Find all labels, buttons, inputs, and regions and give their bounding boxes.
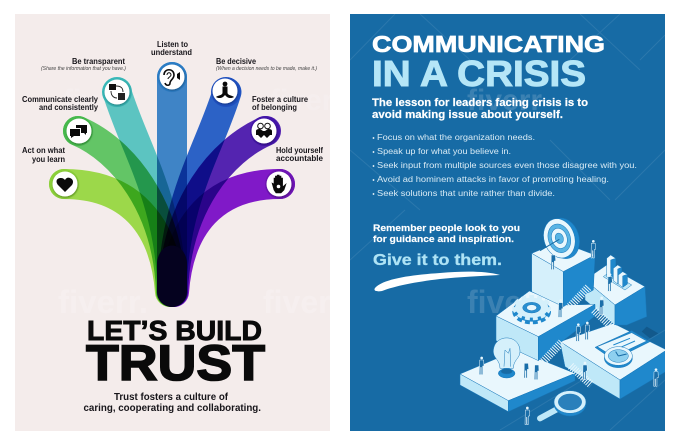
label: be decisive [216, 58, 317, 71]
panel: let's build trust [15, 14, 345, 431]
band: be transparent [117, 92, 172, 292]
brush stroke [374, 272, 500, 291]
title: let's build trust [86, 320, 266, 382]
title: let's build trust: LET’S BUILD [87, 315, 262, 346]
block: lower right [560, 323, 668, 399]
subtitle [84, 392, 261, 414]
panel: communicating in a crisis: fiverr [467, 284, 547, 320]
call to action: Give it to them. [373, 252, 502, 269]
bullet list: Focus on what the organization needs. [377, 133, 535, 142]
label: be decisive: Be decisive [216, 57, 256, 66]
icon: magnifying glass [540, 391, 586, 418]
icon: bar columns [603, 255, 632, 290]
stem [157, 246, 187, 307]
fan chart of seven behaviours [64, 77, 280, 292]
lesson statement: avoid making issue about yourself. [372, 109, 563, 121]
title: communicating in a crisis: IN A CRISIS [372, 53, 586, 94]
label: act on what you learn: you learn [32, 155, 65, 164]
band: communicate clearly [78, 131, 171, 292]
icon: clipboard and stopwatch [595, 331, 650, 368]
icon: target [539, 214, 585, 263]
panel: communicating in a crisis [350, 14, 668, 431]
title: let's build trust: TRUST [86, 335, 265, 391]
label: foster a culture: Foster a culture [252, 95, 309, 104]
lesson statement [372, 97, 588, 121]
block: middle gear platform [496, 291, 595, 361]
label: communicate clearly [22, 95, 99, 112]
label: be transparent [41, 58, 126, 71]
subtitle: Trust fosters a culture of [114, 392, 229, 403]
subtitle: caring, cooperating and collaborating. [84, 403, 261, 414]
label: foster a culture [252, 95, 309, 112]
label: communicate clearly: Communicate clearly [22, 95, 99, 104]
label: hold yourself accountable [276, 147, 323, 161]
isometric illustration [460, 214, 668, 425]
title: communicating in a crisis: COMMUNICATING [372, 31, 605, 57]
panel: let's build trust: fiverr [63, 84, 138, 117]
band: be decisive [172, 92, 227, 292]
panel: let's build trust: fiverr [263, 284, 343, 320]
icon: two people with hearts [250, 116, 280, 146]
label: listen to understand [151, 41, 192, 55]
label: act on what you learn: Act on what [22, 146, 65, 155]
label: act on what you learn [22, 146, 65, 164]
label: listen to understand: Listen to [157, 40, 188, 49]
people [479, 240, 658, 425]
label: be transparent: (Share the information that you have.) [41, 66, 126, 72]
label: listen to understand: understand [151, 48, 192, 57]
label: be transparent: Be transparent [72, 57, 125, 66]
band: act on what you learn [64, 184, 170, 292]
panel: communicating in a crisis: fiverr [467, 84, 542, 117]
icon: ear [157, 62, 187, 92]
bullet list: Seek input from multiple sources even those disagree with you. [377, 161, 637, 170]
block: right chart platform [585, 265, 647, 325]
label: be decisive: (When a decision needs to be made, make it.) [216, 66, 317, 72]
icon: light bulb [493, 338, 520, 378]
bullet list [373, 133, 637, 198]
label: hold yourself accountable: accountable [276, 154, 324, 163]
icon: raised hand [265, 169, 295, 199]
lesson statement: The lesson for leaders facing crisis is to [372, 97, 588, 109]
block: top platform [532, 242, 595, 307]
icon: person deciding [211, 77, 241, 107]
bullet list: Seek solutions that unite rather than divide. [377, 189, 555, 198]
closing reminder: Remember people look to you [373, 223, 520, 233]
icon: heart [49, 169, 79, 199]
label: foster a culture: of belonging [252, 103, 297, 112]
label: communicate clearly: and consistently [39, 103, 99, 112]
panel: let's build trust: fiverr [270, 84, 345, 117]
label: hold yourself accountable: Hold yourself [276, 146, 323, 155]
icon: gear [515, 298, 548, 322]
band: foster a culture [173, 131, 266, 292]
icon: speech bubbles [63, 116, 93, 146]
bullet list: Speak up for what you believe in. [377, 147, 511, 156]
band: hold yourself accountable [174, 184, 280, 292]
closing reminder: for guidance and inspiration. [373, 234, 514, 244]
block: bottom left slab [460, 350, 575, 412]
band: listen to understand [157, 77, 187, 292]
icon: shared documents [102, 77, 132, 107]
bullet list: Avoid ad hominem attacks in favor of promoting healing. [377, 175, 609, 184]
stairs [542, 287, 613, 385]
panel: let's build trust: fiverr. [58, 284, 148, 320]
title: communicating in a crisis [372, 36, 604, 87]
closing reminder [373, 223, 520, 244]
